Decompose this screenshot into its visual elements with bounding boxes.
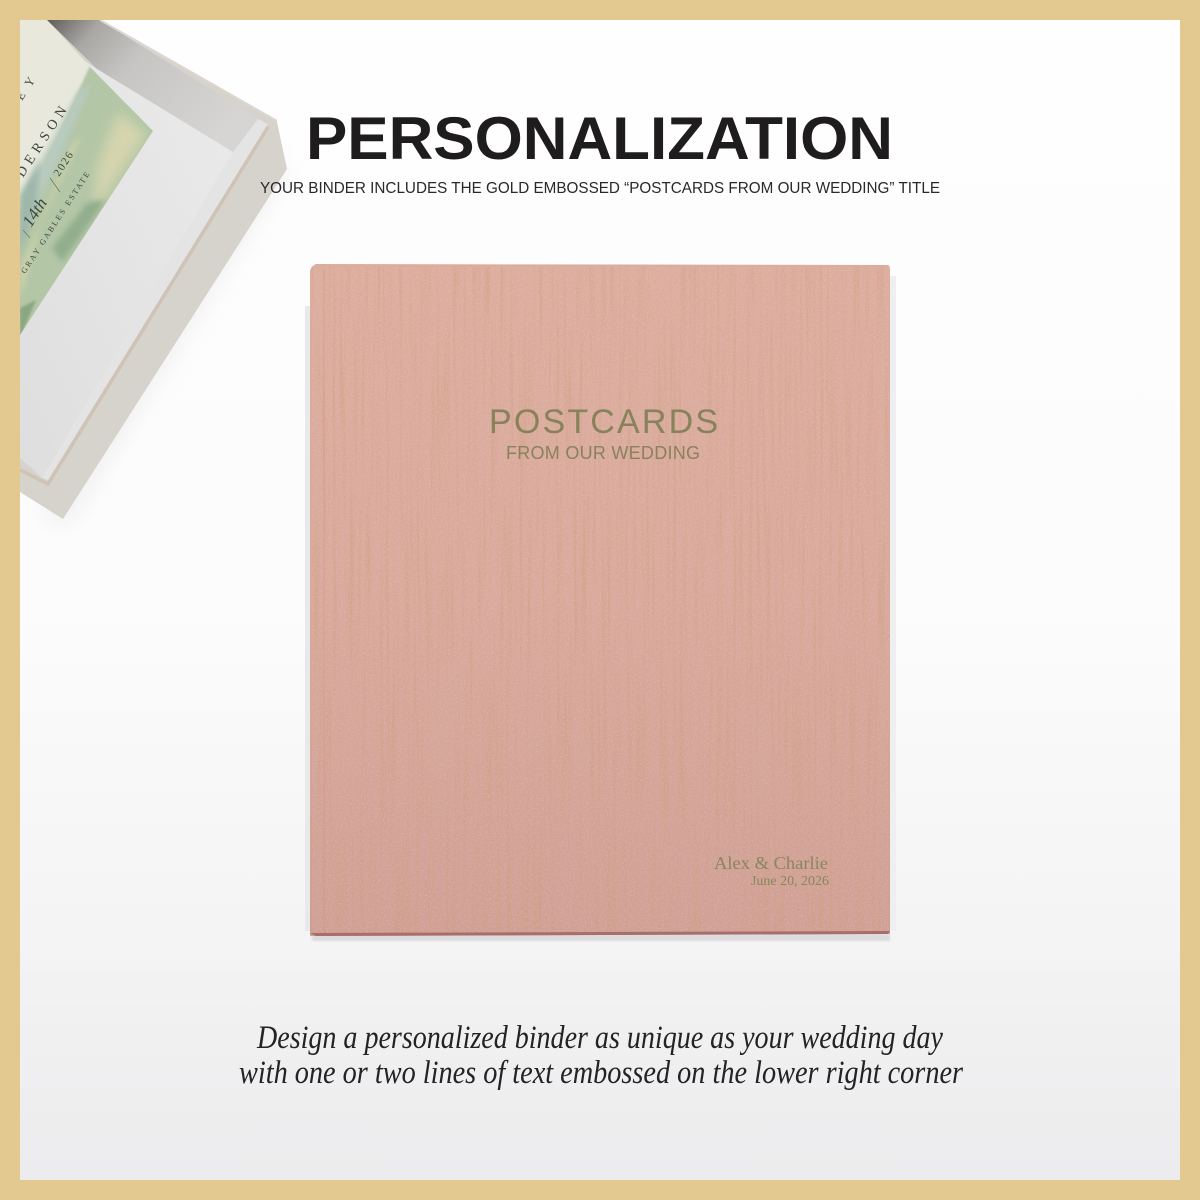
- box outer frame: [20, 20, 287, 519]
- caption: [239, 1020, 963, 1091]
- subtitle: YOUR BINDER INCLUDES THE GOLD EMBOSSED “POSTCARDS FROM OUR WEDDING” TITLE: [260, 180, 940, 197]
- binder shadow: [305, 276, 896, 941]
- card paper: [20, 20, 89, 106]
- caption line 2: with one or two lines of text embossed on the lower right corner: [239, 1055, 963, 1091]
- card text: 14th: [18, 194, 51, 230]
- card text: [20, 76, 90, 273]
- cover cloth: [310, 264, 890, 936]
- box floor: [20, 20, 233, 478]
- embossed names: [714, 853, 829, 888]
- bottom edge: [310, 931, 890, 936]
- card text: 2026: [51, 149, 77, 179]
- caption line 1: Design a personalized binder as unique as your wedding day: [256, 1020, 943, 1056]
- hinge groove: [323, 270, 325, 932]
- POSTCARDS: POSTCARDS: [489, 403, 718, 441]
- photo: open gift box with invitation: [13, 20, 287, 525]
- box shadow: [68, 324, 188, 512]
- title: PERSONALIZATION: [306, 105, 893, 172]
- box inner wall: [47, 20, 192, 110]
- cloth weave texture: [312, 267, 889, 934]
- binder cover: [310, 264, 890, 936]
- watercolor landscape: [18, 66, 158, 345]
- FROM OUR WEDDING: FROM OUR WEDDING: [506, 443, 700, 463]
- invitation card: [20, 20, 153, 335]
- embossed title: [489, 403, 718, 463]
- card text: E Y: [13, 72, 40, 103]
- card text: DERSON: [14, 100, 73, 180]
- box top edge: [100, 20, 277, 121]
- cloth streak texture: [312, 267, 889, 934]
- card text: GRAY GABLES ESTATE: [19, 169, 93, 275]
- Alex and Charlie: Alex & Charlie: [714, 853, 828, 873]
- date: June 20, 2026: [751, 873, 829, 888]
- card divider strokes: [23, 178, 60, 238]
- inner rim: [42, 119, 268, 480]
- rim seam: [20, 127, 268, 484]
